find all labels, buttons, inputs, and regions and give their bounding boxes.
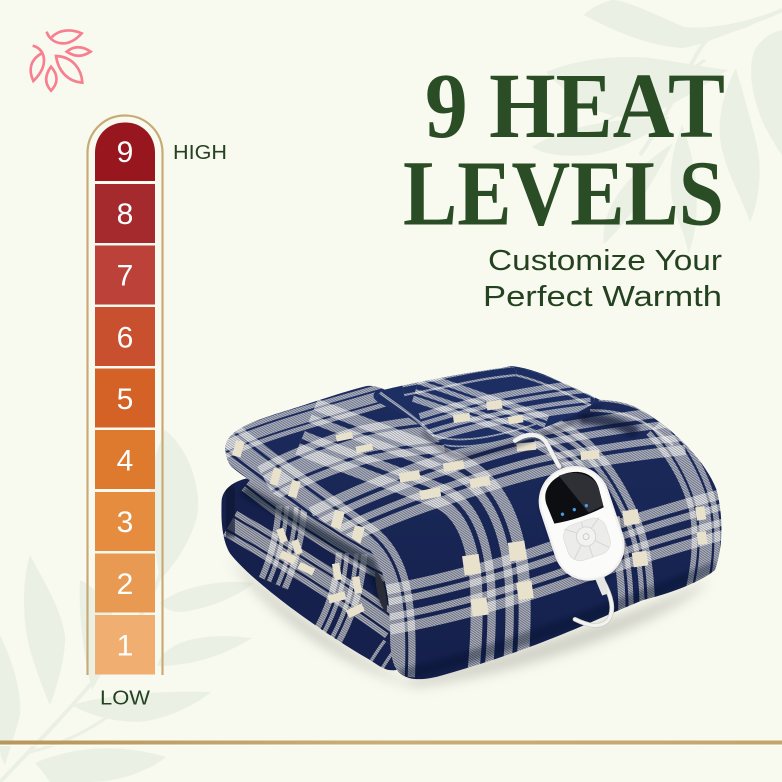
ground shadow — [230, 557, 710, 687]
lower fold cream checks — [276, 527, 365, 618]
remote display — [539, 465, 606, 526]
power cord — [515, 435, 612, 625]
title: LEVELS — [403, 142, 724, 246]
level 8: 8 — [117, 198, 133, 231]
level 9 — [95, 122, 155, 181]
folded flap corner — [367, 360, 607, 457]
level 4: 4 — [117, 444, 133, 478]
remote buttons — [560, 515, 614, 564]
subtitle — [483, 245, 722, 313]
level 3: 3 — [117, 506, 133, 539]
label: low: LOW — [100, 688, 150, 710]
remote controller — [529, 456, 640, 606]
title: 9 HEAT — [425, 55, 725, 158]
level 7 — [95, 246, 155, 304]
level 1 — [95, 615, 155, 674]
level 2 — [95, 554, 155, 612]
level 4 — [95, 430, 155, 489]
flap cream checks — [453, 400, 523, 424]
heat level gauge — [88, 116, 162, 675]
title — [403, 55, 725, 246]
subtitle: Perfect Warmth — [483, 281, 722, 313]
level 7: 7 — [117, 260, 133, 292]
lower fold layer — [221, 478, 397, 670]
gold divider line — [0, 740, 782, 746]
level 9: 9 — [117, 136, 133, 169]
remote indicator lights — [560, 504, 589, 516]
body cream checks — [232, 432, 707, 617]
level 6 — [95, 307, 155, 366]
level 1: 1 — [117, 630, 133, 662]
decorative leaf sprig: bottom left — [0, 430, 254, 782]
fold shadow — [243, 490, 387, 603]
level 5: 5 — [117, 383, 133, 416]
inner fold gap — [375, 570, 387, 613]
decorative leaf sprig: top right — [532, 0, 782, 254]
remote strain relief — [595, 576, 610, 596]
level 2: 2 — [117, 568, 133, 601]
logo: pink leaves — [31, 30, 91, 91]
subtitle: Customize Your — [488, 245, 722, 277]
main blanket body — [225, 366, 722, 680]
level 3 — [95, 492, 155, 551]
body shading — [400, 567, 717, 675]
level 5 — [95, 368, 155, 428]
level 8 — [95, 184, 155, 243]
label: high: HIGH — [173, 142, 227, 164]
level 6: 6 — [117, 322, 133, 354]
folded plaid blanket with remote — [221, 366, 722, 690]
gauge gold outline — [88, 116, 162, 675]
